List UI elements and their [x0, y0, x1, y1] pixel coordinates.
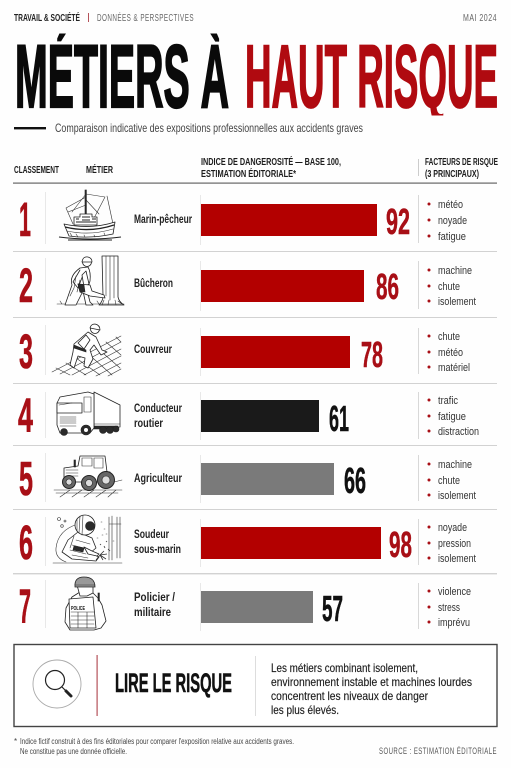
icon: fishing boat [59, 190, 121, 240]
row 5: agriculteur: machine [438, 459, 472, 471]
top bar: MAI 2024 [463, 13, 497, 24]
row 1: marin-pêcheur: 1 [19, 194, 31, 247]
row 1: marin-pêcheur: fatigue [438, 231, 466, 243]
row 5: agriculteur [19, 453, 476, 506]
table header: MÉTIER [86, 163, 113, 176]
icon: tractor [54, 456, 122, 497]
row 3: couvreur: météo [438, 347, 463, 359]
footnote: Indice fictif construit à des fins éditoriales pour comparer l'exposition relative aux accidents graves. [20, 737, 294, 746]
row 4: conducteur routier: fatigue [438, 411, 466, 423]
row 1: marin-pêcheur: météo [438, 199, 463, 211]
table header: ESTIMATION ÉDITORIALE* [201, 167, 297, 180]
row 7: policier / militaire: imprévu [438, 617, 470, 629]
title: MÉTIERS À [15, 26, 229, 126]
row 1: marin-pêcheur: Marin-pêcheur [134, 212, 192, 226]
row 6: soudeur sous-marin [19, 515, 476, 570]
callout text: environnement instable et machines lourdes [271, 675, 472, 689]
row 2: bûcheron: chute [438, 281, 460, 293]
top bar [14, 11, 497, 24]
row 3: couvreur: matériel [438, 362, 470, 374]
row 3: couvreur: 3 [19, 326, 33, 379]
icon: police officer [65, 577, 106, 630]
table header: CLASSEMENT [14, 164, 59, 176]
footnote: Ne constitue pas une donnée officielle. [20, 747, 127, 756]
top bar: DONNÉES & PERSPECTIVES [97, 11, 194, 24]
row 4: conducteur routier: routier [134, 416, 163, 430]
row 2: bûcheron: 2 [19, 260, 33, 313]
row 3: couvreur: 78 [361, 334, 383, 375]
icon: roofer [52, 324, 121, 376]
icon: lumberjack [57, 256, 124, 305]
icon: police officer: POLICE [71, 606, 85, 612]
row 5: agriculteur: isolement [438, 490, 476, 502]
callout panel: lire le risque [14, 644, 497, 726]
row 3: couvreur: chute [438, 331, 460, 343]
table header: INDICE DE DANGEROSITÉ — BASE 100, [201, 155, 341, 168]
row 1: marin-pêcheur: 92 [386, 201, 410, 242]
footnote: * [14, 737, 17, 746]
row 2: bûcheron [19, 256, 476, 313]
row 5: agriculteur: 66 [344, 460, 366, 501]
row 6: soudeur sous-marin: pression [438, 538, 471, 550]
row 2: bûcheron: Bûcheron [134, 276, 173, 290]
row 4: conducteur routier: 61 [329, 398, 349, 439]
top bar: TRAVAIL & SOCIÉTÉ [14, 11, 80, 24]
row 5: agriculteur: 5 [19, 453, 33, 506]
row 4: conducteur routier: trafic [438, 395, 458, 407]
row 7: policier / militaire: 57 [322, 588, 343, 629]
row 7: policier / militaire: Policier / [134, 590, 176, 604]
row 7: policier / militaire: violence [438, 586, 471, 598]
callout text: les plus élevés. [271, 703, 339, 717]
row 4: conducteur routier: 4 [18, 390, 33, 443]
footnote [14, 737, 294, 756]
row 6: soudeur sous-marin: noyade [438, 522, 467, 534]
row 5: agriculteur: chute [438, 475, 460, 487]
row 6: soudeur sous-marin: 98 [389, 524, 412, 565]
row 5: agriculteur: Agriculteur [134, 471, 182, 485]
row 7: policier / militaire: 7 [19, 581, 31, 634]
row separators and column rules [13, 192, 497, 631]
row 6: soudeur sous-marin: isolement [438, 553, 476, 565]
row 3: couvreur [19, 324, 470, 379]
row 6: soudeur sous-marin: 6 [19, 517, 33, 570]
callout panel: lire le risque: LIRE LE RISQUE [115, 668, 232, 698]
table header: (3 PRINCIPAUX) [425, 168, 479, 180]
subtitle: Comparaison indicative des expositions professionnelles aux accidents graves [55, 121, 363, 135]
icon: truck [57, 392, 120, 436]
icon: magnifying glass [33, 660, 81, 708]
callout text: Les métiers combinant isolement, [271, 661, 418, 675]
row 1: marin-pêcheur [19, 190, 467, 247]
row 4: conducteur routier: Conducteur [134, 401, 182, 415]
row 4: conducteur routier: distraction [438, 426, 479, 438]
row 6: soudeur sous-marin: Soudeur [134, 527, 169, 541]
row 3: couvreur: Couvreur [134, 342, 172, 356]
row 4: conducteur routier [18, 390, 479, 443]
row 7: policier / militaire [19, 577, 471, 634]
row 2: bûcheron: isolement [438, 296, 476, 308]
callout text [271, 661, 472, 717]
table header [13, 155, 498, 184]
row 7: policier / militaire: stress [438, 602, 460, 614]
row 6: soudeur sous-marin: sous-marin [134, 542, 181, 556]
row 2: bûcheron: 86 [376, 266, 399, 307]
row 1: marin-pêcheur: noyade [438, 215, 467, 227]
row 7: policier / militaire: militaire [134, 605, 171, 619]
row 2: bûcheron: machine [438, 265, 472, 277]
icon: underwater welder [53, 515, 122, 563]
callout text: concentrent les niveaux de danger [271, 689, 428, 703]
